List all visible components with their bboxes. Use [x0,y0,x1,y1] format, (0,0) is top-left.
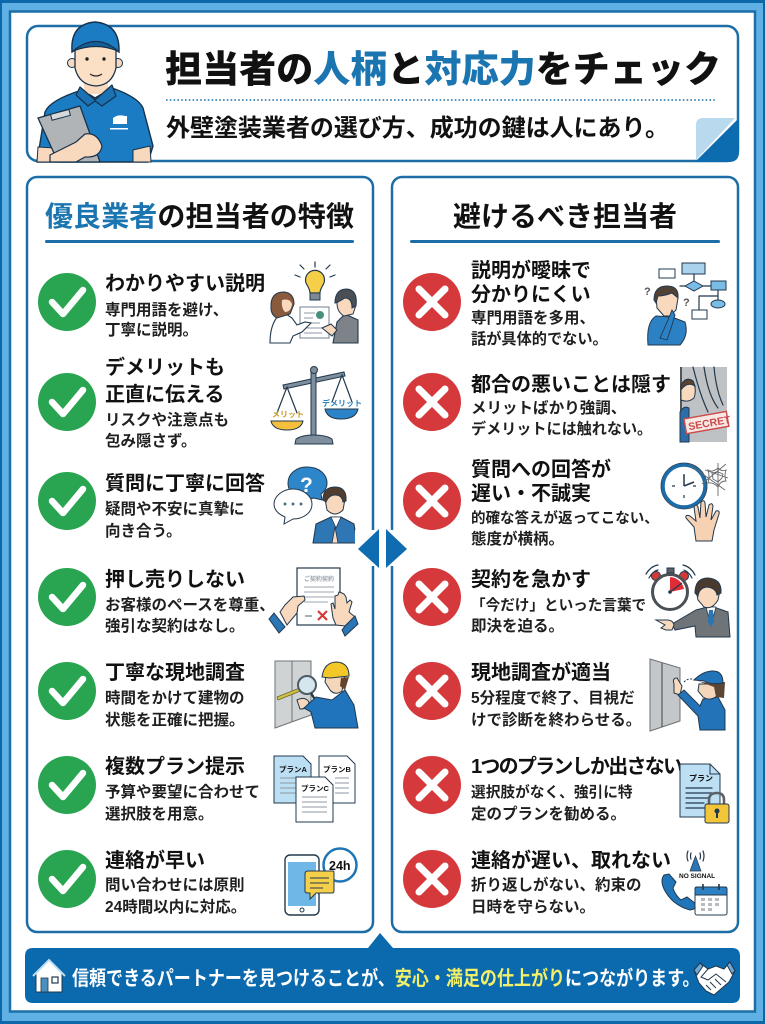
item 2: honest about demerits: 正直に伝える [105,383,224,406]
icon: house [33,960,65,992]
icon: no signal phone and calendar: NO SIGNAL [679,873,715,880]
header panel [27,26,739,162]
item 1: vague explanation: 説明が曖昧で [471,258,591,282]
heading rule: good [45,240,354,243]
item 7: fast contact: 問い合わせには原則 [105,876,245,894]
item 5: careful survey: 丁寧な現地調査 [105,661,245,684]
item 6: single plan only: 選択肢がなく、強引に特 [471,783,633,801]
icon: handshake [694,962,735,995]
icon: three plan documents [274,756,355,822]
item 6: multiple plans: 選択肢を用意。 [105,804,214,823]
item 2: honest about demerits: 包み隠さず。 [105,431,196,450]
icon: three plan documents: プランA [279,765,307,774]
icon: confused man with flowchart: ? [644,286,651,298]
heading: avoid: 避けるべき担当者 [453,201,677,232]
item 4: no hard sell: お客様のペースを尊重、 [105,595,275,614]
icon: balance scale [271,366,362,444]
icon: speech bubbles and man [274,467,357,543]
icon: balance scale: デメリット [322,398,362,408]
item 7: fast contact [38,848,246,916]
icon: two people and lightbulb [270,262,358,343]
item 7: fast contact: 連絡が早い [105,848,205,872]
item 1: vague explanation: 分かりにくい [471,283,591,306]
item 6: single plan only [403,755,683,823]
item 6: single plan only: 1つのプランしか出さない [471,755,683,778]
item 3: answers questions: 質問に丁寧に回答 [105,471,265,495]
dotted title rule [166,99,717,101]
center diamond arrows [355,529,410,568]
item 1: vague explanation: 話が具体的でない。 [471,330,608,348]
item 7: fast contact: 24時間以内に対応。 [105,898,246,916]
icon: single plan with padlock: プラン [689,774,713,783]
item 4: no hard sell: 強引な契約はなし。 [105,616,245,635]
item 1: clear explanation: 丁寧に説明。 [105,320,198,339]
icon: confused man with flowchart: ? [683,297,690,309]
icon: inspector with magnifier [275,661,358,728]
icon: phone and 24h clock: 24h [329,859,351,873]
item 2: honest about demerits [38,355,229,450]
item 3: slow dishonest answers: 遅い・不誠実 [471,482,591,505]
item 6: multiple plans: 予算や要望に合わせて [105,782,260,801]
item 2: hides bad points: 都合の悪いことは隠す [471,373,671,396]
item 7: unreachable: 折り返しがない、約束の [471,875,642,894]
item 5: sloppy survey: 5分程度で終了、目視だ [471,688,635,707]
item 3: answers questions: 向き合う。 [105,522,182,540]
icon: man behind curtain with secret stamp [680,367,732,442]
icon: contract and hands [269,568,358,636]
bottom banner [25,933,740,1003]
item 6: single plan only: 定のプランを勧める。 [471,805,626,823]
item 3: slow dishonest answers [403,457,659,548]
heading: good: 優良業者の担当者の特徴 [45,201,354,232]
item 5: careful survey [38,661,245,729]
item 2: honest about demerits: リスクや注意点も [105,410,229,429]
title: 担当者の人柄と対応力をチェック [165,49,721,90]
item 4: rushes contract [403,568,646,635]
item 5: careful survey: 状態を正確に把握。 [105,710,245,729]
item 7: unreachable: 連絡が遅い、取れない [471,848,671,872]
subtitle: 外壁塗装業者の選び方、成功の鍵は人にあり。 [166,115,669,142]
panel: representatives to avoid [392,177,738,932]
page curl corner [695,118,739,162]
item 1: vague explanation: 専門用語を多用、 [471,308,595,327]
item 3: slow dishonest answers: 的確な答えが返ってこない、 [471,509,659,527]
icon: man behind curtain with secret stamp: SECRET [687,414,732,433]
item 1: clear explanation: わかりやすい説明 [105,272,265,295]
icon: single plan with padlock [680,764,729,823]
item 5: sloppy survey: けで診断を終わらせる。 [471,711,641,729]
item 7: unreachable: 日時を守らない。 [471,898,595,916]
item 3: slow dishonest answers: 質問への回答が [471,457,611,481]
icon: worker with clipboard [37,22,153,162]
icon: confused man with flowchart [644,263,726,345]
item 4: no hard sell [38,568,275,635]
item 6: multiple plans [38,755,260,823]
item 3: answers questions [38,471,265,540]
icon: no signal phone and calendar [662,851,727,915]
item 3: answers questions: 疑問や不安に真摯に [105,499,245,518]
item 1: vague explanation [403,258,608,348]
item 1: clear explanation: 専門用語を避け、 [105,300,228,319]
item 4: rushes contract: 即決を迫る。 [471,617,564,635]
panel: good representative [27,177,373,932]
icon: clock, cobweb and hand [661,463,728,541]
item 4: rushes contract: 契約を急かす [471,568,591,591]
icon: three plan documents: プランB [323,765,351,774]
item 4: no hard sell: 押し売りしない [105,568,245,591]
item 3: slow dishonest answers: 態度が横柄。 [471,529,564,548]
icon: alarm clock and pointing salesman [646,565,730,637]
icon: contract and hands: ご契約契約 [304,575,334,583]
item 2: hides bad points [403,373,671,438]
item 5: sloppy survey [403,660,641,729]
icon: balance scale: メリット [272,410,304,419]
item 2: honest about demerits: デメリットも [105,355,225,379]
item 5: careful survey: 時間をかけて建物の [105,689,245,707]
icon: speech bubbles and man: ? [300,474,313,497]
banner message: 信頼できるパートナーを見つけることが、安心・満足の仕上がりにつながります。 [72,967,700,989]
item 5: sloppy survey: 現地調査が適当 [471,660,611,684]
item 4: rushes contract: 「今だけ」といった言葉で [471,596,646,614]
item 7: unreachable [403,848,671,916]
heading rule: avoid [410,240,720,243]
item 2: hides bad points: メリットばかり強調、 [471,399,626,417]
icon: phone and 24h clock [285,848,356,915]
item 1: clear explanation [38,272,265,339]
item 6: multiple plans: 複数プラン提示 [105,755,245,778]
icon: three plan documents: プランC [301,784,329,793]
item 2: hides bad points: デメリットには触れない。 [471,420,652,438]
icon: quick glance survey [650,659,725,731]
